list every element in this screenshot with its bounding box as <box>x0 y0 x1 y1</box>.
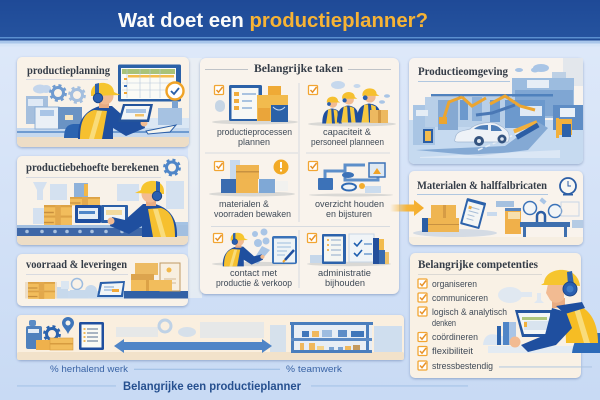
label: capaciteit en personeel plannen: capaciteit & <box>323 127 372 137</box>
task: contact met productie en verkoop <box>212 228 297 266</box>
footer line left <box>17 384 116 387</box>
faint background shapes <box>116 320 402 352</box>
label: productieprocessen plannen: plannen <box>238 137 270 147</box>
label: administratie bijhouden <box>318 268 371 288</box>
item: logisch en analytisch denken: logisch & analytisch <box>432 307 507 317</box>
panel base band <box>17 137 189 147</box>
desk band <box>483 334 600 353</box>
faint headset illustration <box>498 287 544 303</box>
item: coordineren: coördineren <box>432 332 478 342</box>
header banner <box>0 0 600 46</box>
heading side rules <box>205 68 391 70</box>
factory scene <box>409 58 583 164</box>
label: productieprocessen plannen: productieprocessen <box>217 127 292 137</box>
icon: gear <box>164 160 180 175</box>
panel base band <box>17 236 188 245</box>
worker <box>108 181 177 237</box>
label: administratie bijhouden: administratie <box>318 268 371 278</box>
label: materialen en voorraden bewaken: materialen & <box>219 199 270 209</box>
panel: productieomgeving <box>409 58 583 164</box>
boxes <box>44 183 100 225</box>
heading: materialen en halffalbricaten: Materialen & halffalbricaten <box>417 180 548 192</box>
connecting line <box>134 368 280 371</box>
heading rule <box>417 193 548 196</box>
monitor with schedule <box>118 64 181 109</box>
item: logisch en analytisch denken: denken <box>432 318 456 328</box>
panel: belangrijke competenties <box>410 253 600 378</box>
tablet <box>97 281 125 297</box>
base band <box>409 237 583 245</box>
heading: belangrijke competenties: Belangrijke competenties <box>418 259 538 271</box>
item: organiseren: organiseren <box>432 279 477 289</box>
panel: materialen en halffabricaten <box>390 171 583 245</box>
label: capaciteit en personeel plannen: personeel planneen <box>311 137 384 147</box>
task: productieprocessen plannen <box>212 85 298 124</box>
chair <box>64 124 99 138</box>
item: communiceren: communiceren <box>432 293 488 303</box>
icon: location pin <box>62 317 74 334</box>
label: herhalend werk: % herhalend werk <box>50 364 128 375</box>
monitor on right <box>158 108 182 125</box>
laptop <box>118 104 153 122</box>
notebook <box>146 125 176 134</box>
arrow: double-headed <box>114 339 272 353</box>
worker <box>510 270 598 352</box>
heading rule <box>26 273 128 276</box>
task: capaciteit en personeel plannen <box>308 81 396 126</box>
panel: belangrijke taken <box>200 58 399 294</box>
conveyor <box>17 225 188 236</box>
label: productieprocessen plannen <box>217 127 292 147</box>
heading rule <box>418 273 542 276</box>
footer line right <box>311 384 468 387</box>
heading: productieomgeving: Productieomgeving <box>418 66 508 78</box>
chair <box>572 333 600 353</box>
label: overzicht houden en bijsturen: en bijsturen <box>326 209 372 219</box>
boxes left <box>25 282 57 299</box>
heading: voorraad en leveringen: voorraad & leveringen <box>26 259 128 271</box>
label: materialen en voorraden bewaken <box>214 199 291 219</box>
faint icons <box>57 278 97 298</box>
heading rule <box>26 176 161 179</box>
item: stressbestendig: stressbestendig <box>432 361 493 371</box>
base band <box>17 352 404 360</box>
label: contact met productie en verkoop <box>216 268 292 288</box>
machine and gauges <box>487 198 583 237</box>
arrow: orange <box>390 200 424 216</box>
badge: check <box>166 82 184 100</box>
list: competencies <box>418 279 507 371</box>
laptop <box>515 310 553 337</box>
panel: productiebehoefte berekenen <box>17 156 188 245</box>
heading rule <box>26 78 108 81</box>
faint backdrop strips <box>188 58 202 298</box>
label: overzicht houden en bijsturen: overzicht houden <box>315 199 384 209</box>
icon: robot <box>26 320 42 349</box>
faint process icons <box>33 181 188 235</box>
panel: herhalend werk en teamwerk <box>17 315 404 360</box>
grid dividers <box>205 83 390 288</box>
icon: cloud and gears <box>33 84 85 103</box>
panel: voorraad en leveringen <box>17 254 188 306</box>
task: administratie bijhouden <box>307 234 391 266</box>
desk band <box>17 118 189 137</box>
icon: clipboard <box>79 322 104 350</box>
label: teamwerk: % teamwerk <box>286 364 342 375</box>
clipboard <box>460 198 486 229</box>
label: capaciteit en personeel plannen <box>311 127 384 147</box>
footer heading: Belangrijke een productieplanner <box>123 381 302 393</box>
label: contact met productie en verkoop: productie & verkoop <box>216 278 292 288</box>
task: materialen en voorraden bewaken <box>209 160 295 196</box>
boxes <box>36 338 73 350</box>
item: flexibiliteit: flexibiliteit <box>432 346 473 356</box>
conveyor <box>25 291 188 298</box>
label: contact met productie en verkoop: contact met <box>230 268 277 278</box>
boxes <box>413 205 497 237</box>
binders <box>497 322 516 345</box>
task: overzicht houden en bijsturen <box>308 162 393 196</box>
machines <box>26 96 82 129</box>
rule beside last item <box>499 366 592 368</box>
label: materialen en voorraden bewaken: voorraden bewaken <box>214 209 291 219</box>
shelf <box>290 322 373 353</box>
heading: productiebehoefte berekenen: productiebehoefte berekenen <box>26 162 160 174</box>
panel: productieplanning <box>17 57 189 147</box>
item: logisch en analytisch denken <box>418 307 507 328</box>
title: Wat doet een productieplanner? <box>118 9 428 32</box>
heading: productieplanning: productieplanning <box>27 65 110 77</box>
label: overzicht houden en bijsturen <box>315 199 384 219</box>
icon: gear <box>44 326 60 342</box>
heading: belangrijke taken: Belangrijke taken <box>254 63 344 75</box>
heading rule <box>418 80 510 83</box>
worker <box>78 83 148 139</box>
icon: clock <box>560 178 576 196</box>
boxes right with note <box>131 263 180 291</box>
clouds <box>515 64 549 72</box>
label: administratie bijhouden: bijhouden <box>325 278 365 288</box>
tablets <box>75 205 128 223</box>
